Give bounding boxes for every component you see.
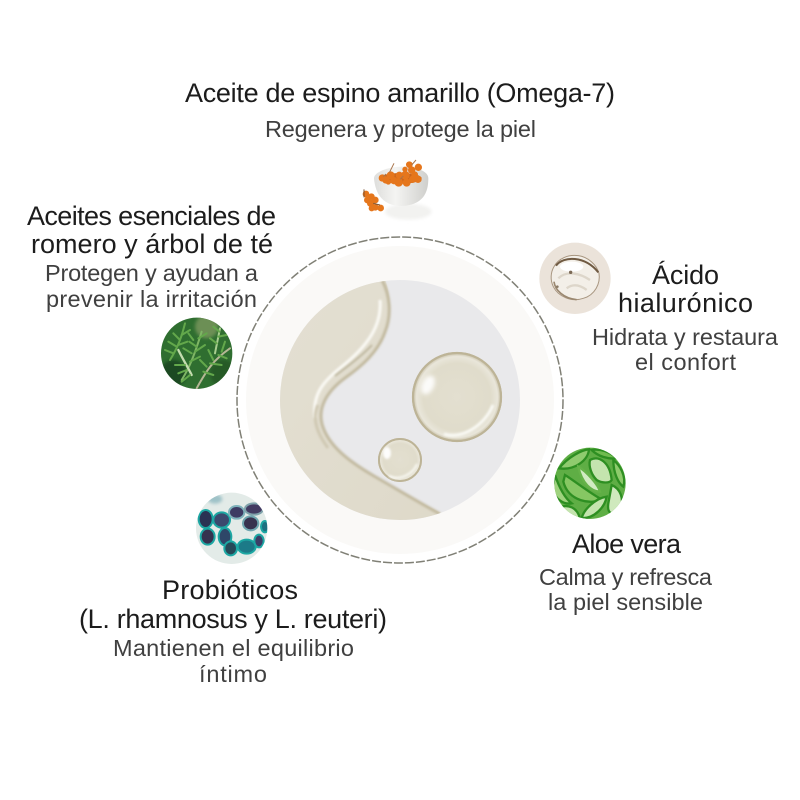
description: el confort (635, 349, 736, 375)
description: prevenir la irritación (46, 286, 257, 312)
description: íntimo (199, 661, 267, 687)
description: Regenera y protege la piel (265, 116, 536, 142)
heading: Aceites esenciales de (27, 201, 276, 231)
heading: romero y árbol de té (31, 229, 273, 259)
description: Calma y refresca (539, 564, 713, 590)
heading (618, 260, 753, 318)
heading (79, 575, 387, 634)
text: aloe vera (539, 529, 713, 615)
description: Hidrata y restaura (592, 324, 779, 350)
text: sea buckthorn oil (185, 78, 615, 142)
heading: hialurónico (618, 288, 753, 318)
text: probiotics (79, 575, 387, 687)
icon: rosemary (161, 318, 232, 389)
heading: Aloe vera (572, 529, 682, 559)
icon: hyaluronic acid cream (539, 243, 611, 314)
serum texture image (280, 280, 520, 520)
central circle illustration (237, 237, 563, 563)
large droplet (412, 352, 502, 442)
loose sprig (363, 191, 384, 211)
text: hyaluronic acid (592, 260, 779, 375)
heading: Probióticos (162, 575, 298, 605)
heading (27, 201, 276, 259)
dashed ring (237, 237, 563, 563)
description: Mantienen el equilibrio (113, 635, 354, 661)
description: Protegen y ayudan a (45, 260, 259, 286)
heading: Aceite de espino amarillo (Omega-7) (185, 78, 615, 108)
icon: aloe vera slices (554, 448, 626, 519)
description (539, 564, 713, 615)
description (113, 635, 354, 687)
text: essential oils (27, 201, 276, 312)
icon: sea buckthorn berries in bowl (363, 160, 432, 220)
heading: Ácido (652, 260, 719, 290)
pale disc (246, 246, 554, 554)
description (45, 260, 259, 312)
icon: probiotic bacteria (195, 492, 269, 565)
description: la piel sensible (548, 589, 703, 615)
small droplet (378, 438, 422, 482)
heading: (L. rhamnosus y L. reuteri) (79, 604, 387, 634)
description (592, 324, 779, 375)
